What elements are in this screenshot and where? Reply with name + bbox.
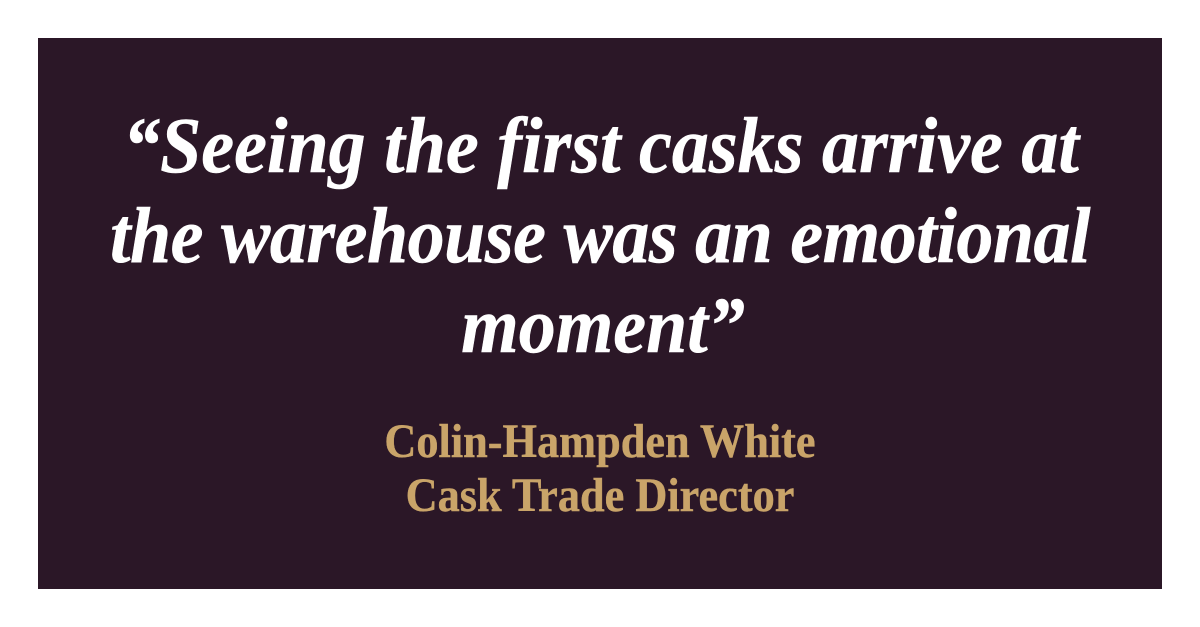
attribution: Colin-Hampden White [384,415,816,468]
quote text: “Seeing the first casks arrive at [123,102,1079,190]
attribution: Cask Trade Director [406,469,794,522]
quote text: the warehouse was an emotional [110,192,1090,280]
quote text [110,102,1091,370]
quote text: moment” [461,282,745,370]
attribution [384,415,816,522]
